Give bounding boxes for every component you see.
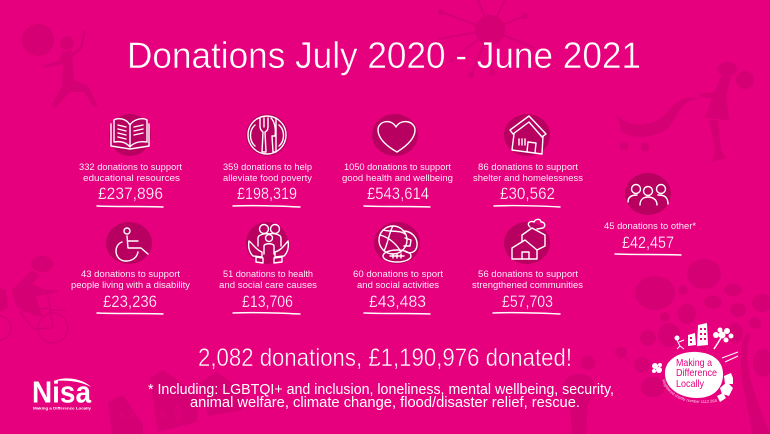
underline [493,313,560,314]
silhouette: sun [438,0,535,78]
amount: sport: £43,483 [369,293,426,311]
icon: sports balls [374,222,420,264]
icon: open book [109,114,151,156]
silhouette: figure with balloon [22,24,98,108]
headline total: 2,082 donations, £1,190,976 donated! [198,344,572,372]
icon: wheelchair [106,222,152,264]
donation: other [604,173,697,255]
icon: heart [372,114,418,156]
logo: Nisa: Making a Difference Locally [33,406,91,410]
amount: shelter: £30,562 [500,185,555,203]
amount: disability: £23,236 [103,293,157,311]
icon: plate and cutlery [246,114,288,156]
underline [233,313,300,314]
text: shelter count: 86 donations to support [478,162,579,172]
underline [364,313,430,314]
amount: social care: £13,706 [242,293,293,311]
amount: education: £237,896 [98,185,163,203]
silhouette: woman with pram [617,62,754,162]
icon: group of people [625,173,671,215]
amount: other: £42,457 [622,234,674,252]
donation: communities [472,219,584,314]
underline [97,206,163,207]
text: health count: good health and wellbeing [342,173,453,183]
badge text: Difference [676,367,717,379]
donation: food poverty [223,114,313,207]
underline [97,313,163,314]
badge arc text [662,380,716,403]
underline [494,206,560,207]
text: other count: 45 donations to other* [604,221,697,231]
donation: education [79,114,183,207]
text: disability count: 43 donations to support [81,269,181,279]
text: food count: 359 donations to help [223,162,312,172]
underline [364,206,430,207]
footnote: * Including: LGBTQI+ and inclusion, loneliness, mental wellbeing, security, [148,382,614,398]
badge text: Making a [676,357,712,369]
icon: community houses [504,219,550,264]
icon: house [504,114,550,156]
underline [615,254,681,255]
silhouette: houses [108,370,245,434]
donation: disability [71,222,191,314]
text: social care count: and social care causes [219,280,318,290]
donation: health [342,114,453,207]
title: Donations July 2020 - June 2021 [127,35,641,76]
silhouette: tree [615,259,770,434]
badge town illustration [652,323,738,402]
badge: Making a Difference Locally: Registered charity number 1112 2682 [662,379,717,403]
footnote: animal welfare, climate change, flood/disaster relief, rescue. [190,395,580,411]
donation: sport [353,222,444,314]
donation: social care [219,222,318,314]
text: communities count: strengthened communities [472,280,584,290]
text: communities count: 56 donations to support [478,269,579,279]
text: health count: 1050 donations to support [344,162,451,172]
text: education count: 332 donations to support [79,162,183,172]
text: shelter count: shelter and homelessness [473,173,584,183]
amount: communities: £57,703 [502,293,553,311]
silhouette: cyclist [0,256,68,343]
underline [233,206,300,207]
text: education count: educational resources [83,173,181,183]
amount: health: £543,614 [367,185,429,203]
badge text: Locally [676,378,705,390]
logo: Nisa: Nisa [32,374,92,410]
text: social care count: 51 donations to health [223,269,313,279]
donation: shelter [473,114,584,207]
text: disability count: people living with a disability [71,280,191,290]
white icon details [690,328,706,343]
text: sport count: 60 donations to sport [353,269,444,279]
text: sport count: and social activities [357,280,440,290]
icon: family in hands [246,222,288,264]
silhouette: figure behind footnote [563,356,595,434]
amount: food: £198,319 [237,185,297,203]
text: food count: alleviate food poverty [223,173,313,183]
